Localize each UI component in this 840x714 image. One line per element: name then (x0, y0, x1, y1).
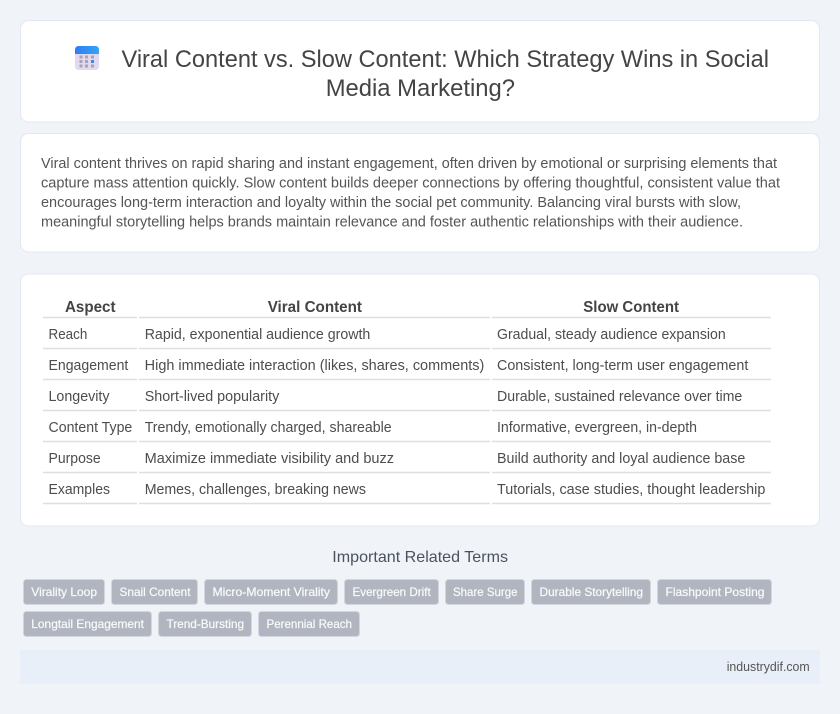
tag: Durable Storytelling: Durable Storytelling (540, 585, 643, 599)
row: examples: Examples (48, 482, 110, 498)
row: purpose (48, 451, 745, 467)
intro paragraph: meaningful storytelling helps brands maintain relevance and foster authentic relationships with their audience. (41, 214, 743, 230)
table header row: Aspect (65, 299, 116, 316)
row: content type: Trendy, emotionally charged, shareable (145, 420, 392, 436)
tag: Perennial Reach (258, 612, 360, 636)
row: content type: Content Type (48, 420, 132, 436)
row: content type (48, 420, 697, 436)
row: reach: Gradual, steady audience expansion (497, 327, 726, 343)
icon: calendar (75, 46, 99, 70)
intro paragraph: encourages long-term interaction and loyalty within the social pet community. Balancing viral bursts with slow, (41, 195, 741, 211)
tag: Micro-Moment Virality (204, 580, 338, 604)
row: examples (48, 482, 765, 498)
row: purpose: Build authority and loyal audience base (497, 451, 745, 467)
footer bar (20, 650, 820, 684)
row: engagement (48, 358, 748, 374)
intro paragraph: Viral content thrives on rapid sharing and instant engagement, often driven by emotional or surprising elements that (41, 156, 777, 172)
row: purpose: Maximize immediate visibility and buzz (145, 451, 394, 467)
panel: comparison table (20, 274, 820, 526)
row: longevity: Durable, sustained relevance over time (497, 389, 742, 405)
intro paragraph (41, 156, 780, 230)
tag: Flashpoint Posting (658, 580, 772, 604)
panel: introduction (20, 134, 820, 252)
row: reach (48, 327, 726, 343)
row: reach: Rapid, exponential audience growth (145, 327, 370, 343)
row: engagement: Engagement (48, 358, 128, 374)
tag: Longtail Engagement: Longtail Engagement (31, 617, 145, 631)
row: reach: Reach (48, 327, 87, 343)
intro paragraph: capture mass attention quickly. Slow content builds deeper connections by offering thoughtful, consistent value that (41, 176, 780, 192)
row: longevity: Short-lived popularity (145, 389, 280, 405)
tag: Snail Content (112, 580, 198, 604)
row: longevity: Longevity (48, 389, 110, 405)
tag: Trend-Bursting (158, 612, 252, 636)
tag: Share Surge (446, 580, 524, 604)
tag: Share Surge: Share Surge (453, 585, 518, 599)
tag: Flashpoint Posting: Flashpoint Posting (666, 585, 764, 599)
tag: Evergreen Drift: Evergreen Drift (352, 585, 431, 599)
related term tags (24, 580, 772, 636)
tag: Virality Loop (24, 580, 104, 604)
row: content type: Informative, evergreen, in-depth (497, 420, 697, 436)
row: engagement: Consistent, long-term user engagement (497, 358, 748, 374)
tag: Durable Storytelling (532, 580, 650, 604)
row: engagement: High immediate interaction (likes, shares, comments) (145, 358, 484, 374)
tag: Snail Content: Snail Content (120, 585, 191, 599)
tag: Evergreen Drift (344, 580, 438, 604)
table header row (65, 299, 680, 316)
title (122, 46, 769, 102)
footer source text: industrydif.com (727, 660, 810, 674)
row: examples: Tutorials, case studies, thought leadership (497, 482, 765, 498)
panel: header (20, 20, 820, 122)
row: examples: Memes, challenges, breaking news (145, 482, 366, 498)
table header row: Viral Content (268, 299, 363, 316)
title: Viral Content vs. Slow Content: Which Strategy Wins in Social (122, 46, 769, 73)
title: Media Marketing? (326, 75, 515, 102)
heading: related terms: Important Related Terms (332, 549, 508, 566)
tag: Perennial Reach: Perennial Reach (266, 617, 352, 631)
row: longevity (48, 389, 742, 405)
row: purpose: Purpose (48, 451, 101, 467)
tag: Virality Loop: Virality Loop (31, 585, 97, 599)
tag: Micro-Moment Virality: Micro-Moment Virality (212, 585, 330, 599)
tag: Trend-Bursting: Trend-Bursting (166, 617, 244, 631)
tag: Longtail Engagement (24, 612, 152, 636)
table header row: Slow Content (583, 299, 680, 316)
